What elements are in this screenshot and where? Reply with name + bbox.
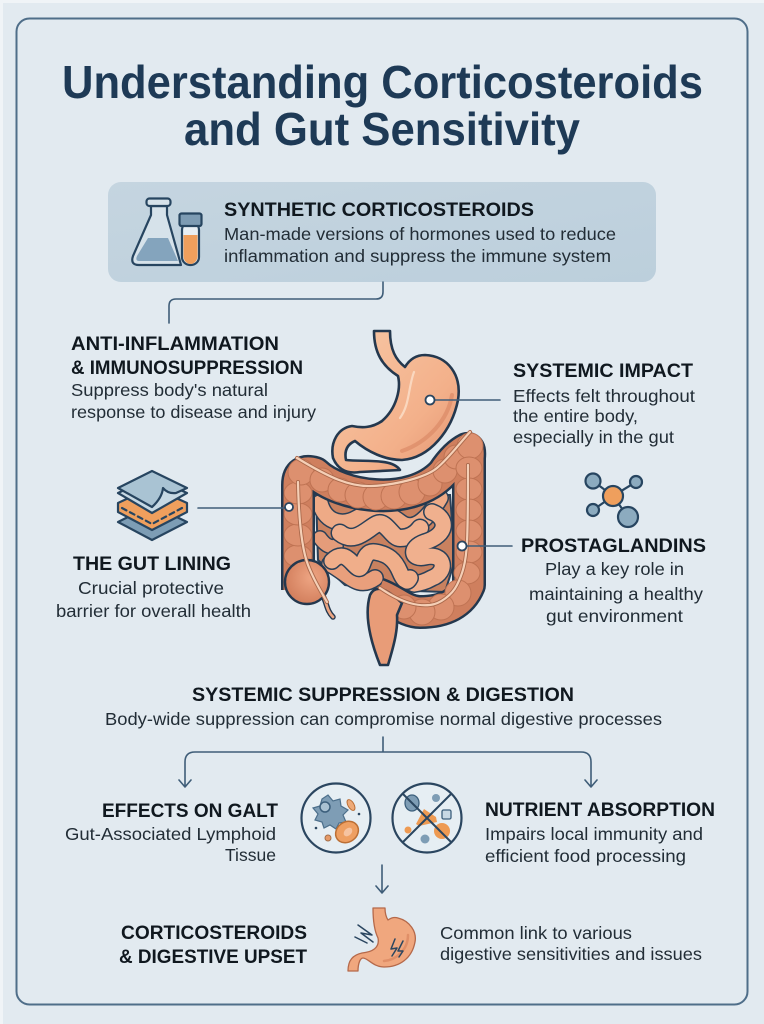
text block: systemic suppression: Body-wide suppression can compromise normal digestive processes xyxy=(105,709,662,729)
text block: prostaglandins: maintaining a healthy xyxy=(529,584,703,604)
callout line: prostaglandins xyxy=(458,542,512,550)
cecum and appendix xyxy=(285,560,333,617)
icon: gut lining layers xyxy=(118,471,187,540)
icon: immune cells xyxy=(302,784,370,852)
icon: molecule xyxy=(586,474,642,527)
text block: systemic impact: especially in the gut xyxy=(513,427,674,447)
rectum xyxy=(368,589,402,665)
text block: anti-inflammation: & IMMUNOSUPPRESSION xyxy=(71,358,303,379)
heading: SYNTHETIC CORTICOSTEROIDS xyxy=(224,200,534,221)
text block: systemic suppression xyxy=(105,685,662,729)
text block: digestive upset description xyxy=(440,923,702,964)
title: and Gut Sensitivity xyxy=(184,103,580,155)
description xyxy=(224,224,616,266)
description: Man-made versions of hormones used to reduce xyxy=(224,224,616,244)
title: Understanding Corticosteroids xyxy=(62,56,703,108)
text block: prostaglandins: gut environment xyxy=(546,606,683,626)
text block: the gut lining: Crucial protective xyxy=(78,578,224,598)
text block: systemic suppression: SYSTEMIC SUPPRESSION & DIGESTION xyxy=(192,685,574,706)
text block: prostaglandins: PROSTAGLANDINS xyxy=(521,536,706,557)
text block: the gut lining xyxy=(56,554,251,621)
text block: effects on galt: Tissue xyxy=(225,845,276,865)
text block: anti-inflammation: ANTI-INFLAMMATION xyxy=(71,334,279,355)
text block: digestive upset description: Common link to various xyxy=(440,923,632,943)
callout line: gut lining xyxy=(198,503,293,511)
text block: nutrient absorption: Impairs local immunity and xyxy=(485,824,703,844)
callout line: stomach xyxy=(426,396,500,404)
text block: nutrient absorption: efficient food processing xyxy=(485,846,686,866)
text block: prostaglandins xyxy=(521,536,706,626)
icon: blocked nutrients xyxy=(392,784,462,852)
large intestine xyxy=(284,432,483,665)
text block: anti-inflammation: Suppress body's natural xyxy=(71,380,268,400)
arrow: down to digestive upset xyxy=(376,865,388,893)
text block: effects on galt: Gut-Associated Lymphoid xyxy=(65,824,276,844)
description: inflammation and suppress the immune system xyxy=(224,246,611,266)
text block: digestive upset heading xyxy=(119,923,307,968)
panel: synthetic corticosteroids xyxy=(108,182,656,282)
title xyxy=(62,56,703,155)
text block: nutrient absorption xyxy=(485,800,715,866)
text block: digestive upset heading: & DIGESTIVE UPSET xyxy=(119,947,307,968)
small intestine xyxy=(316,495,455,592)
icon: upset stomach xyxy=(348,908,415,971)
text block: effects on galt xyxy=(65,801,278,865)
text block: systemic impact xyxy=(513,361,695,447)
text block: effects on galt: EFFECTS ON GALT xyxy=(102,801,278,822)
text block: nutrient absorption: NUTRIENT ABSORPTION xyxy=(485,800,715,821)
text block: systemic impact: Effects felt throughout xyxy=(513,386,695,406)
text block: the gut lining: THE GUT LINING xyxy=(73,554,231,575)
arrows: branching connector xyxy=(179,737,597,787)
illustration: digestive system xyxy=(284,331,483,665)
text block: digestive upset description: digestive sensitivities and issues xyxy=(440,944,702,964)
icon: flask and test tube xyxy=(132,198,202,265)
text block: anti-inflammation: response to disease and injury xyxy=(71,402,316,422)
stomach xyxy=(332,331,459,472)
text block: systemic impact: the entire body, xyxy=(513,406,638,426)
text block: the gut lining: barrier for overall health xyxy=(56,601,251,621)
text block: systemic impact: SYSTEMIC IMPACT xyxy=(513,361,693,382)
colon stripe xyxy=(297,432,470,605)
text block: anti-inflammation xyxy=(71,334,316,422)
connector: panel to anti-inflammation xyxy=(169,282,383,323)
text block: prostaglandins: Play a key role in xyxy=(545,559,684,579)
haustra xyxy=(284,433,483,625)
text block: digestive upset heading: CORTICOSTEROIDS xyxy=(121,923,307,944)
